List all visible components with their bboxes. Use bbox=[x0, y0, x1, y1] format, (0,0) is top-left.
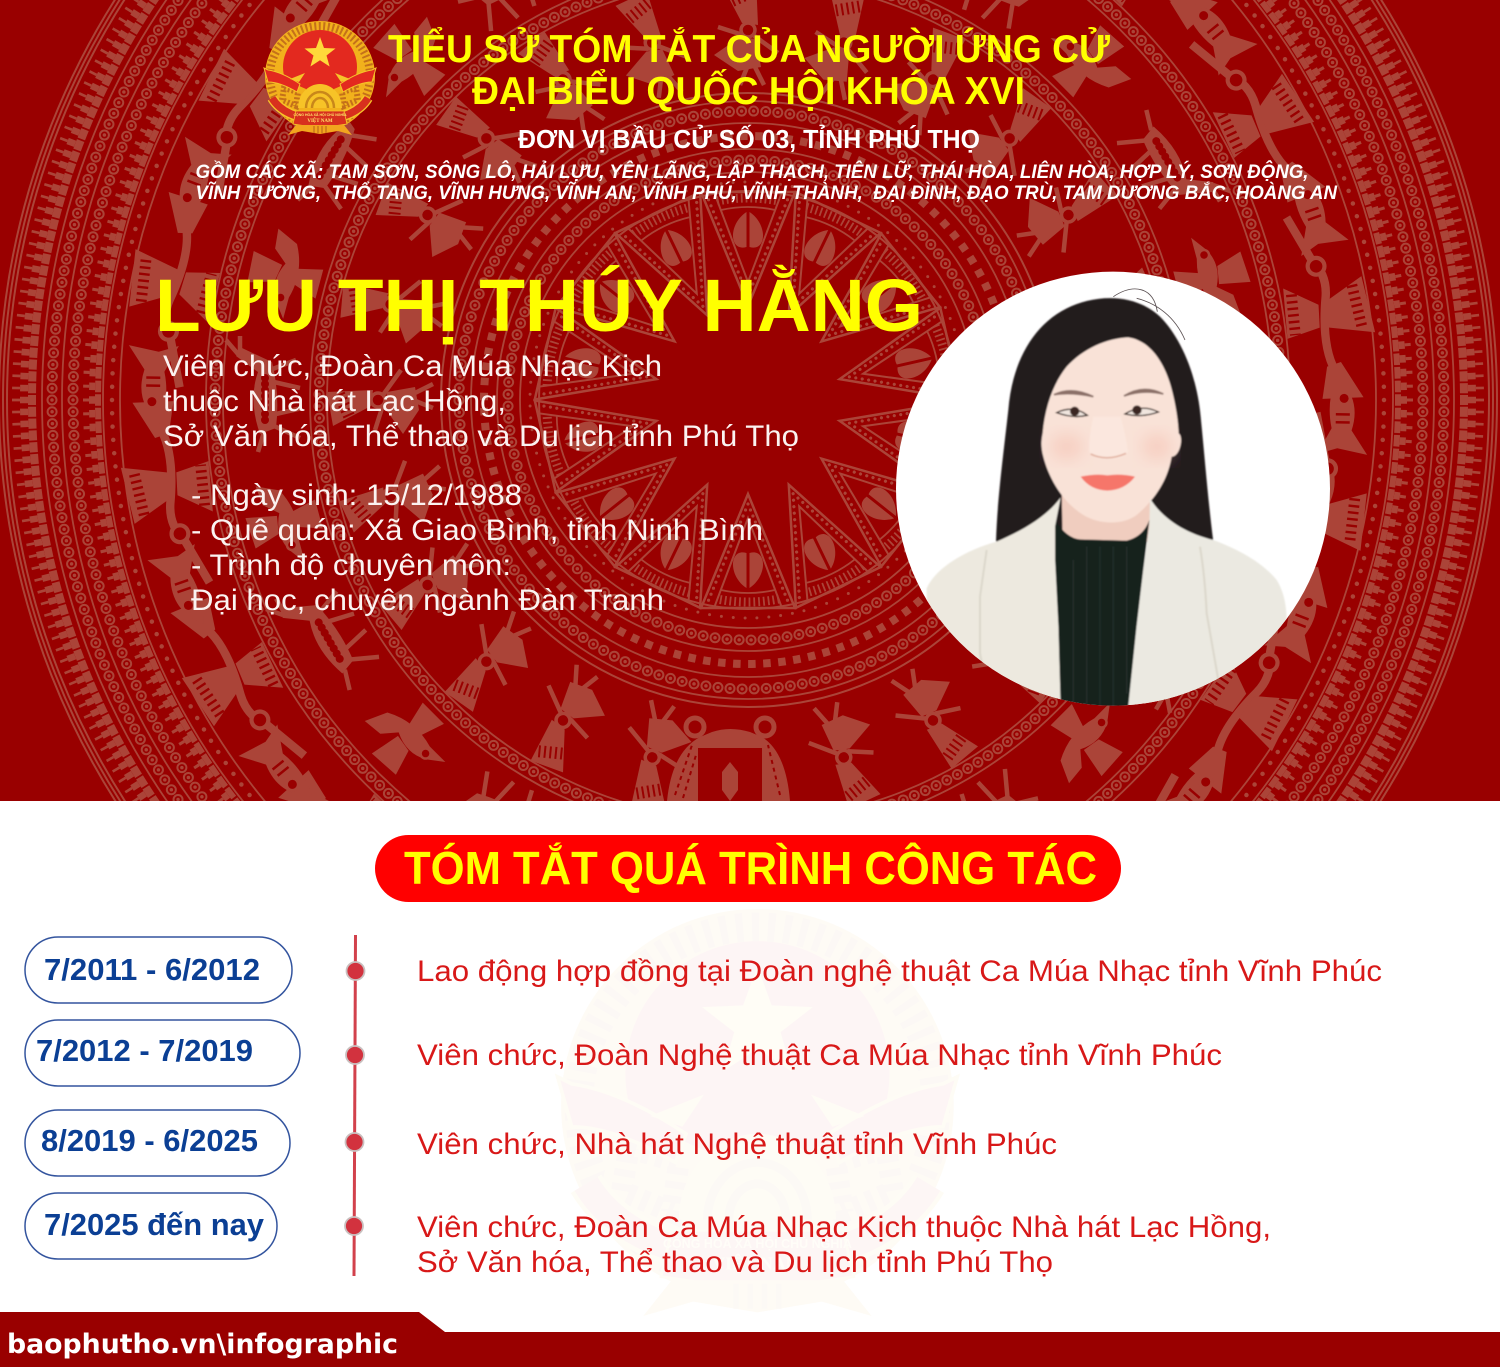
date pill: 8/2019 - 6/2025 bbox=[25, 1110, 290, 1176]
candidate name: LƯU THỊ THÚY HẰNG bbox=[155, 264, 923, 347]
date pill: 7/2025 đến nay bbox=[25, 1193, 277, 1259]
career item 3: Viên chức, Nhà hát Nghệ thuật tỉnh Vĩnh Phúc bbox=[417, 1128, 1057, 1161]
date pill: 7/2012 - 7/2019 bbox=[25, 1020, 300, 1086]
text block: personal details bbox=[191, 479, 763, 617]
title: heading block: ĐẠI BIỂU QUỐC HỘI KHÓA XVI bbox=[472, 68, 1025, 113]
face bbox=[1041, 337, 1181, 522]
date pill: 8/2019 - 6/2025: 8/2019 - 6/2025 bbox=[41, 1123, 258, 1158]
timeline line with dots bbox=[345, 935, 364, 1276]
text block: list of communes: VĨNH TƯỜNG, THỔ TANG, VĨNH HƯNG, VĨNH AN, VĨNH PHÚ, VĨNH THÀNH, ĐẠI ĐÌNH, ĐẠO TRÙ, TAM DƯƠNG BẮC, HOÀNG AN bbox=[196, 182, 1338, 204]
sweater bbox=[1055, 520, 1149, 707]
career item 4 bbox=[417, 1211, 1271, 1279]
text block: list of communes: GỒM CÁC XÃ: TAM SƠN, SÔNG LÔ, HẢI LỰU, YÊN LÃNG, LẬP THẠCH, TIÊN LỮ, THÁI HÒA, LIÊN HÒA, HỢP LÝ, SƠN ĐỘNG, bbox=[196, 161, 1308, 183]
footer band with site address bbox=[0, 1312, 1500, 1367]
cheeks bbox=[1050, 433, 1083, 460]
date pill: 7/2011 - 6/2012: 7/2011 - 6/2012 bbox=[44, 952, 260, 987]
career item 2: Viên chức, Đoàn Nghệ thuật Ca Múa Nhạc tỉnh Vĩnh Phúc bbox=[417, 1039, 1222, 1072]
text block: personal details: - Trình độ chuyên môn: bbox=[191, 549, 511, 582]
bronze drum background pattern bbox=[0, 0, 1498, 801]
neck bbox=[1062, 490, 1151, 542]
heading banner: career summary: TÓM TẮT QUÁ TRÌNH CÔNG TÁC bbox=[404, 842, 1097, 894]
career item 1: Lao động hợp đồng tại Đoàn nghệ thuật Ca Múa Nhạc tỉnh Vĩnh Phúc bbox=[417, 955, 1382, 988]
national emblem bbox=[264, 21, 376, 135]
panel: white lower section background bbox=[0, 801, 1500, 1367]
coat bbox=[927, 497, 1061, 707]
career item 4: Viên chức, Đoàn Ca Múa Nhạc Kịch thuộc Nhà hát Lạc Hồng, bbox=[417, 1211, 1271, 1244]
nose bbox=[1090, 440, 1092, 452]
text block: position: thuộc Nhà hát Lạc Hồng, bbox=[163, 385, 506, 418]
hair bbox=[996, 298, 1213, 542]
text block: personal details: Đại học, chuyên ngành Đàn Tranh bbox=[191, 584, 664, 617]
text block: position: Viên chức, Đoàn Ca Múa Nhạc Kịch bbox=[163, 350, 662, 383]
panel: red header background bbox=[0, 0, 1500, 801]
title: heading block: TIỂU SỬ TÓM TẮT CỦA NGƯỜI ỨNG CỬ bbox=[388, 26, 1111, 71]
date pill: 7/2025 đến nay: 7/2025 đến nay bbox=[44, 1207, 265, 1242]
portrait photo bbox=[896, 272, 1330, 707]
subheading: electoral unit: ĐƠN VỊ BẦU CỬ SỐ 03, TỈNH PHÚ THỌ bbox=[518, 123, 980, 154]
watermark emblem on white section bbox=[557, 909, 957, 1316]
footer band with site address: baophutho.vn\infographic bbox=[7, 1329, 398, 1360]
national emblem: CỘNG HÒA XÃ HỘI CHỦ NGHĨA bbox=[294, 112, 347, 117]
national emblem: VIỆT NAM bbox=[307, 118, 333, 124]
date pill: 7/2012 - 7/2019: 7/2012 - 7/2019 bbox=[36, 1033, 253, 1068]
text block: position bbox=[163, 350, 799, 453]
date pill: 7/2011 - 6/2012 bbox=[25, 937, 292, 1003]
lips bbox=[1081, 475, 1135, 491]
eyes bbox=[1057, 408, 1158, 417]
text block: personal details: - Ngày sinh: 15/12/1988 bbox=[191, 479, 522, 512]
text block: list of communes bbox=[196, 161, 1338, 204]
title: heading block bbox=[388, 26, 1111, 113]
text block: position: Sở Văn hóa, Thể thao và Du lịch tỉnh Phú Thọ bbox=[163, 420, 799, 453]
text block: personal details: - Quê quán: Xã Giao Bình, tỉnh Ninh Bình bbox=[191, 514, 763, 547]
career item 4: Sở Văn hóa, Thể thao và Du lịch tỉnh Phú Thọ bbox=[417, 1246, 1053, 1279]
eyebrows bbox=[1054, 389, 1163, 397]
